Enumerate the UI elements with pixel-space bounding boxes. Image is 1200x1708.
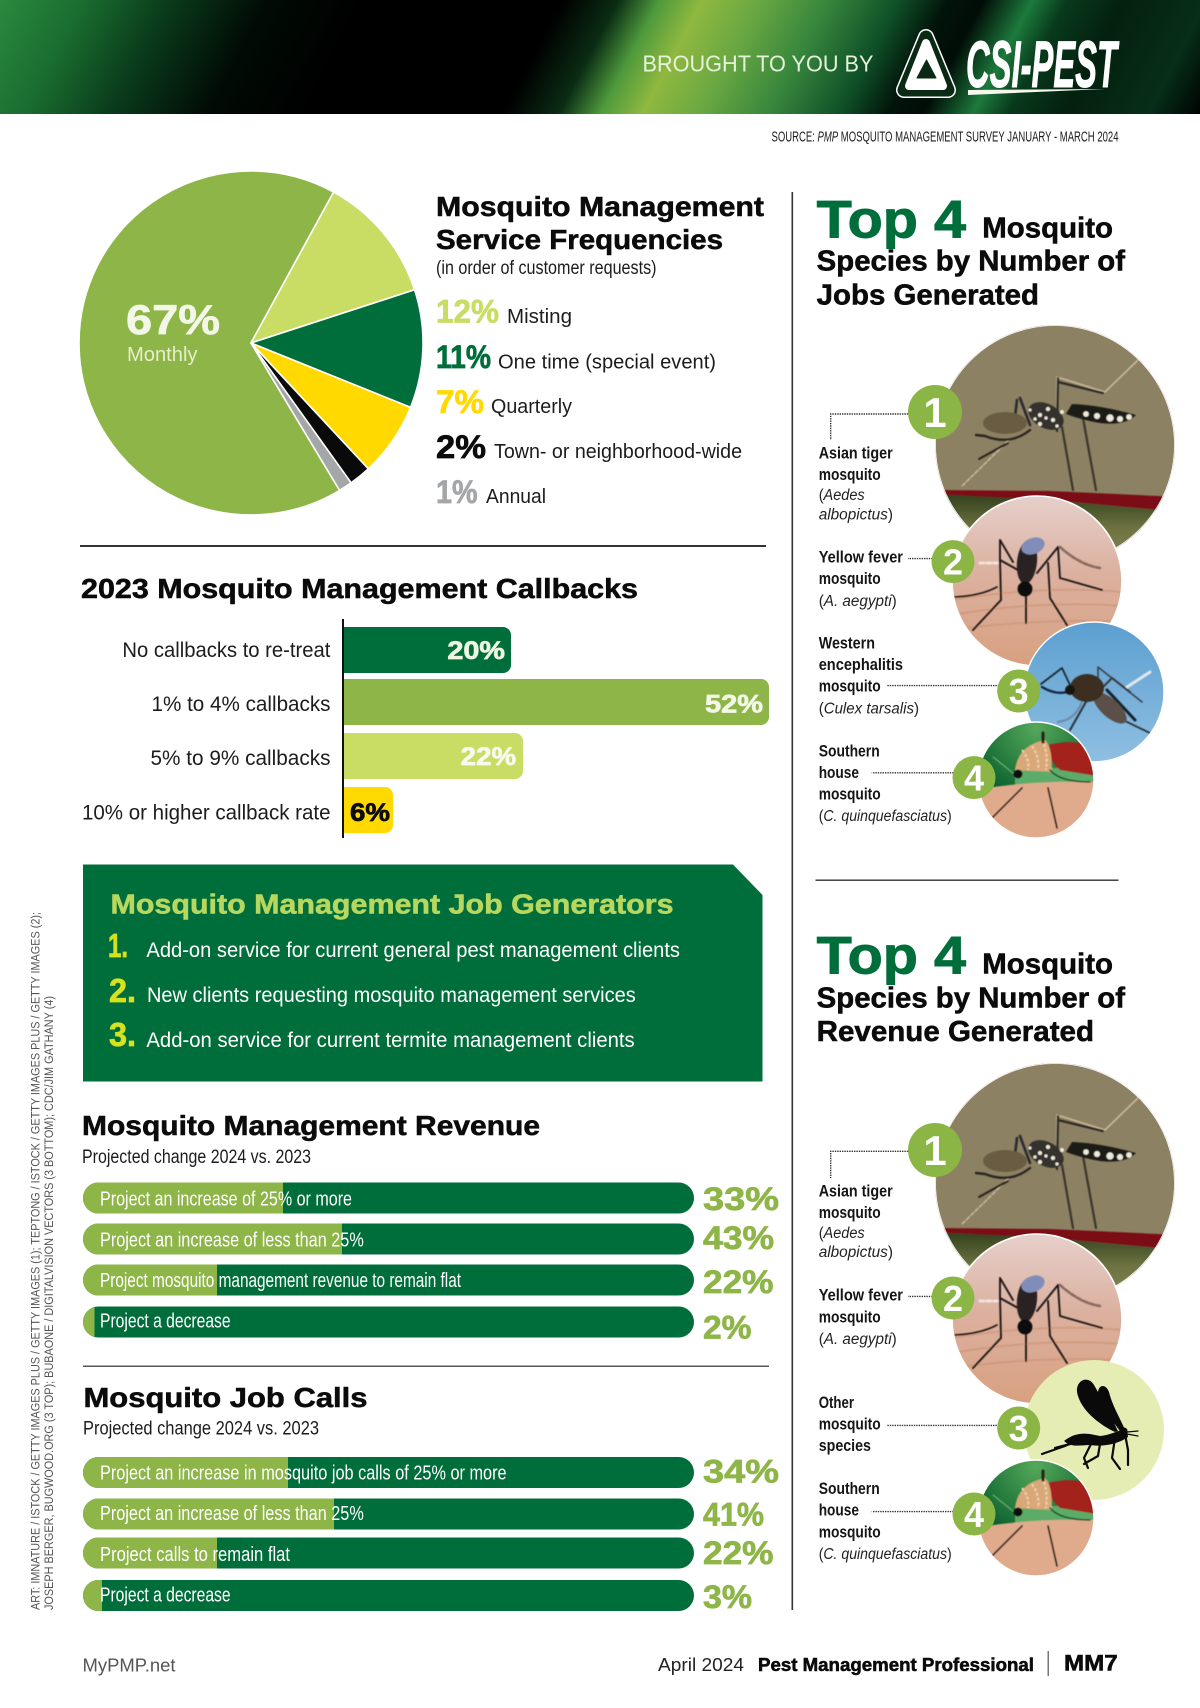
legend: service frequencies: 1% [436, 474, 478, 510]
heading: Mosquito [982, 949, 1113, 981]
footer [82, 1651, 1118, 1676]
stacked bars: revenue [83, 1181, 779, 1346]
heading: job calls: Projected change 2024 vs. 2023 [83, 1418, 319, 1440]
footer: Pest Management Professional [758, 1655, 1034, 1675]
header banner [0, 0, 1200, 114]
species 4 label [819, 742, 996, 825]
bar: no callbacks 20% [122, 627, 511, 673]
bar: remain flat 22%: 22% [703, 1264, 774, 1300]
species 2 label [819, 540, 974, 610]
species 4 label: mosquito [819, 1524, 881, 1542]
species 1 label: Asian tiger [819, 1182, 893, 1200]
bar: remain flat 22% [83, 1535, 773, 1571]
panel heading: service frequencies: Service Frequencies [436, 224, 723, 255]
heading: revenue: Projected change 2024 vs. 2023 [82, 1147, 311, 1168]
bar: increase 25% or more 34% [83, 1454, 779, 1490]
species 1 label: mosquito [819, 1204, 881, 1222]
bar: increase 25% or more 34%: Project an increase in mosquito job calls of 25% or more [100, 1462, 507, 1484]
heading: job calls [83, 1382, 368, 1440]
species 2 label [819, 1276, 974, 1348]
species 1 label [819, 1123, 962, 1261]
bar: decrease 3% [83, 1579, 752, 1615]
bar: 1% to 4% 52%: 52% [705, 690, 763, 718]
species 1 label: Asian tiger [819, 444, 893, 462]
panel heading: service frequencies: (in order of customer requests) [436, 258, 656, 279]
species 4 label: (C. quinquefasciatus) [819, 1546, 952, 1563]
bar: increase less than 25% 43% [83, 1220, 774, 1256]
species 3 label: encephalitis [819, 656, 903, 674]
sponsor line: BROUGHT TO YOU BY [642, 50, 874, 76]
stacked bars: job calls [83, 1454, 779, 1615]
legend: service frequencies: Quarterly [491, 396, 572, 418]
heading: Jobs Generated [817, 280, 1039, 312]
heading: Species by Number of [817, 246, 1125, 278]
species 1 label: (Aedes [819, 487, 865, 504]
panel heading: service frequencies: Mosquito Management [436, 191, 764, 222]
species 3 label: Other [819, 1394, 854, 1412]
bar: remain flat 22%: 22% [703, 1535, 774, 1571]
legend: service frequencies: 2% [436, 429, 486, 465]
legend: service frequencies: One time (special event) [498, 352, 716, 374]
bar: no callbacks 20%: 20% [447, 637, 505, 665]
species 2 label: Yellow fever [819, 548, 904, 566]
photo: southern house mosquito [975, 722, 1100, 845]
panel heading: Mosquito Management Job Generators [110, 888, 674, 920]
bar: increase 25% or more 33%: 33% [703, 1181, 779, 1217]
footer: MM7 [1064, 1651, 1118, 1676]
bar: remain flat 22%: Project mosquito management revenue to remain flat [100, 1270, 461, 1292]
photo: southern house mosquito [975, 1460, 1100, 1583]
species 4 label: 4 [964, 1494, 984, 1535]
bar: 10% or higher 6%: 6% [350, 799, 390, 827]
bar: 1% to 4% 52% [152, 679, 769, 725]
heading: revenue [82, 1110, 540, 1168]
species 3 label: mosquito [819, 1416, 881, 1434]
bar: increase less than 25% 43%: Project an increase of less than 25% [100, 1230, 364, 1252]
item 2: 2. [109, 972, 136, 1009]
pie label: 67% monthly [126, 296, 220, 366]
panel: top 4 species by jobs [817, 191, 1180, 845]
heading: revenue: Mosquito Management Revenue [82, 1110, 540, 1141]
panel: job generators [83, 864, 762, 1082]
legend: service frequencies: 11% [436, 339, 491, 375]
heading: Revenue Generated [817, 1016, 1094, 1048]
item 3: Add-on service for current termite management clients [146, 1029, 635, 1052]
species 3 label: mosquito [819, 678, 881, 696]
pie label: 67% monthly: Monthly [127, 344, 198, 366]
item 2: New clients requesting mosquito management services [147, 984, 636, 1007]
pie label: 67% monthly: 67% [126, 296, 220, 343]
heading: Species by Number of [817, 982, 1125, 1014]
icon: mosquito silhouette on pale circle [1024, 1360, 1164, 1500]
species 2 label: Yellow fever [819, 1286, 904, 1304]
item 1: Add-on service for current general pest management clients [146, 939, 680, 962]
panel heading: service frequencies [436, 191, 764, 279]
species 2 label: mosquito [819, 570, 881, 588]
heading: Top 4 [817, 191, 967, 250]
heading: callbacks: 2023 Mosquito Management Callbacks [81, 573, 638, 604]
heading [817, 927, 1125, 1048]
bar: 10% or higher 6%: 10% or higher callback rate [82, 802, 330, 824]
photo credits: ART: IMNATURE / ISTOCK / GETTY IMAGES PLUS / GETTY IMAGES (1); TEPTONG / ISTOCK / GETTY IMAGES PLUS / GETTY IMAGES (2); [30, 912, 42, 1610]
bar: 5% to 9% 22%: 22% [461, 743, 516, 771]
item 1: 1. [108, 927, 128, 964]
bar: decrease 2% [83, 1306, 752, 1346]
legend: service frequencies: 12% [436, 294, 499, 330]
item 1 [108, 927, 680, 964]
bar: decrease 3%: Project a decrease [100, 1585, 231, 1607]
photo: Asian tiger mosquito [930, 325, 1180, 570]
logo swoosh [968, 89, 1105, 95]
heading: Top 4 [817, 927, 967, 986]
species 2 label: 2 [943, 542, 963, 583]
species 4 label: Southern [819, 1480, 880, 1498]
bar: decrease 3%: 3% [703, 1579, 752, 1615]
photo: yellow fever mosquito [952, 496, 1122, 666]
species 4 label: mosquito [819, 786, 881, 804]
panel: top 4 species by revenue [817, 927, 1180, 1583]
species 2 label: mosquito [819, 1308, 881, 1326]
bar: increase 25% or more 34%: 34% [703, 1454, 779, 1490]
species 3 label: Western [819, 634, 875, 652]
bar: no callbacks 20%: No callbacks to re-treat [122, 639, 331, 662]
species 4 label: Southern [819, 742, 880, 760]
bar: increase less than 25% 41%: 41% [703, 1496, 764, 1532]
species 3 label [819, 1394, 1040, 1455]
species 2 label: 2 [943, 1278, 963, 1319]
species 1 label: (Aedes [819, 1225, 865, 1242]
species 3 label: (Culex tarsalis) [819, 700, 919, 717]
species 3 label: 3 [1009, 671, 1029, 712]
photo: western encephalitis mosquito [1024, 622, 1164, 762]
species 4 label [819, 1480, 996, 1563]
bar: decrease 2%: Project a decrease [100, 1311, 231, 1333]
species 4 label: 4 [964, 758, 984, 799]
species 3 label: species [819, 1437, 871, 1455]
bar chart: callbacks [82, 619, 769, 838]
species 1 label: 1 [923, 389, 947, 436]
species 1 label: albopictus) [819, 1244, 893, 1261]
item 3 [109, 1016, 635, 1053]
species 1 label: 1 [923, 1127, 947, 1174]
bar: increase 25% or more 33%: Project an increase of 25% or more [100, 1188, 352, 1210]
photo: yellow fever mosquito [952, 1234, 1122, 1404]
photo credits: JOSEPH BERGER, BUGWOOD.ORG (3 TOP); BUBAONE / DIGITALVISION VECTORS (3 BOTTOM); CDC/JIM GATHANY (4) [44, 996, 56, 1610]
bar: 5% to 9% 22%: 5% to 9% callbacks [150, 747, 330, 770]
bar: remain flat 22% [83, 1264, 773, 1300]
pie chart: service frequencies [79, 171, 423, 515]
species 3 label [819, 634, 1040, 717]
species 3 label: 3 [1009, 1408, 1029, 1449]
bar: increase less than 25% 41% [83, 1496, 764, 1532]
photo: Asian tiger mosquito [930, 1063, 1180, 1308]
icon: CSI-Pest triangle logo [904, 37, 948, 90]
footer: April 2024 [658, 1655, 744, 1675]
bar: increase less than 25% 41%: Project an increase of less than 25% [100, 1503, 364, 1525]
species 4 label: (C. quinquefasciatus) [819, 808, 952, 825]
heading [817, 191, 1125, 312]
photo credits [30, 912, 56, 1610]
species 4 label: house [819, 1502, 859, 1520]
species 1 label: mosquito [819, 466, 881, 484]
legend: service frequencies: Annual [486, 486, 546, 508]
legend: service frequencies: Misting [507, 306, 572, 328]
item 2 [109, 972, 636, 1009]
bar: decrease 2%: 2% [703, 1310, 752, 1346]
species 2 label: (A. aegypti) [819, 1331, 897, 1348]
legend: service frequencies: Town- or neighborhood-wide [494, 441, 742, 463]
species 1 label: albopictus) [819, 507, 893, 524]
heading: job calls: Mosquito Job Calls [84, 1382, 368, 1413]
footer: MyPMP.net [82, 1654, 176, 1676]
species 1 label [819, 385, 962, 524]
heading: Mosquito [982, 213, 1113, 245]
bar: increase less than 25% 43%: 43% [703, 1220, 774, 1256]
bar: 1% to 4% 52%: 1% to 4% callbacks [152, 693, 330, 716]
bar: remain flat 22%: Project calls to remain flat [100, 1544, 290, 1566]
item 3: 3. [109, 1016, 136, 1053]
bar: 10% or higher 6% [82, 787, 393, 833]
bar: 5% to 9% 22% [150, 733, 523, 779]
species 2 label: (A. aegypti) [819, 593, 897, 610]
legend: service frequencies [436, 294, 742, 510]
legend: service frequencies: 7% [436, 384, 484, 420]
species 4 label: house [819, 764, 859, 782]
bar: increase 25% or more 33% [83, 1181, 779, 1217]
